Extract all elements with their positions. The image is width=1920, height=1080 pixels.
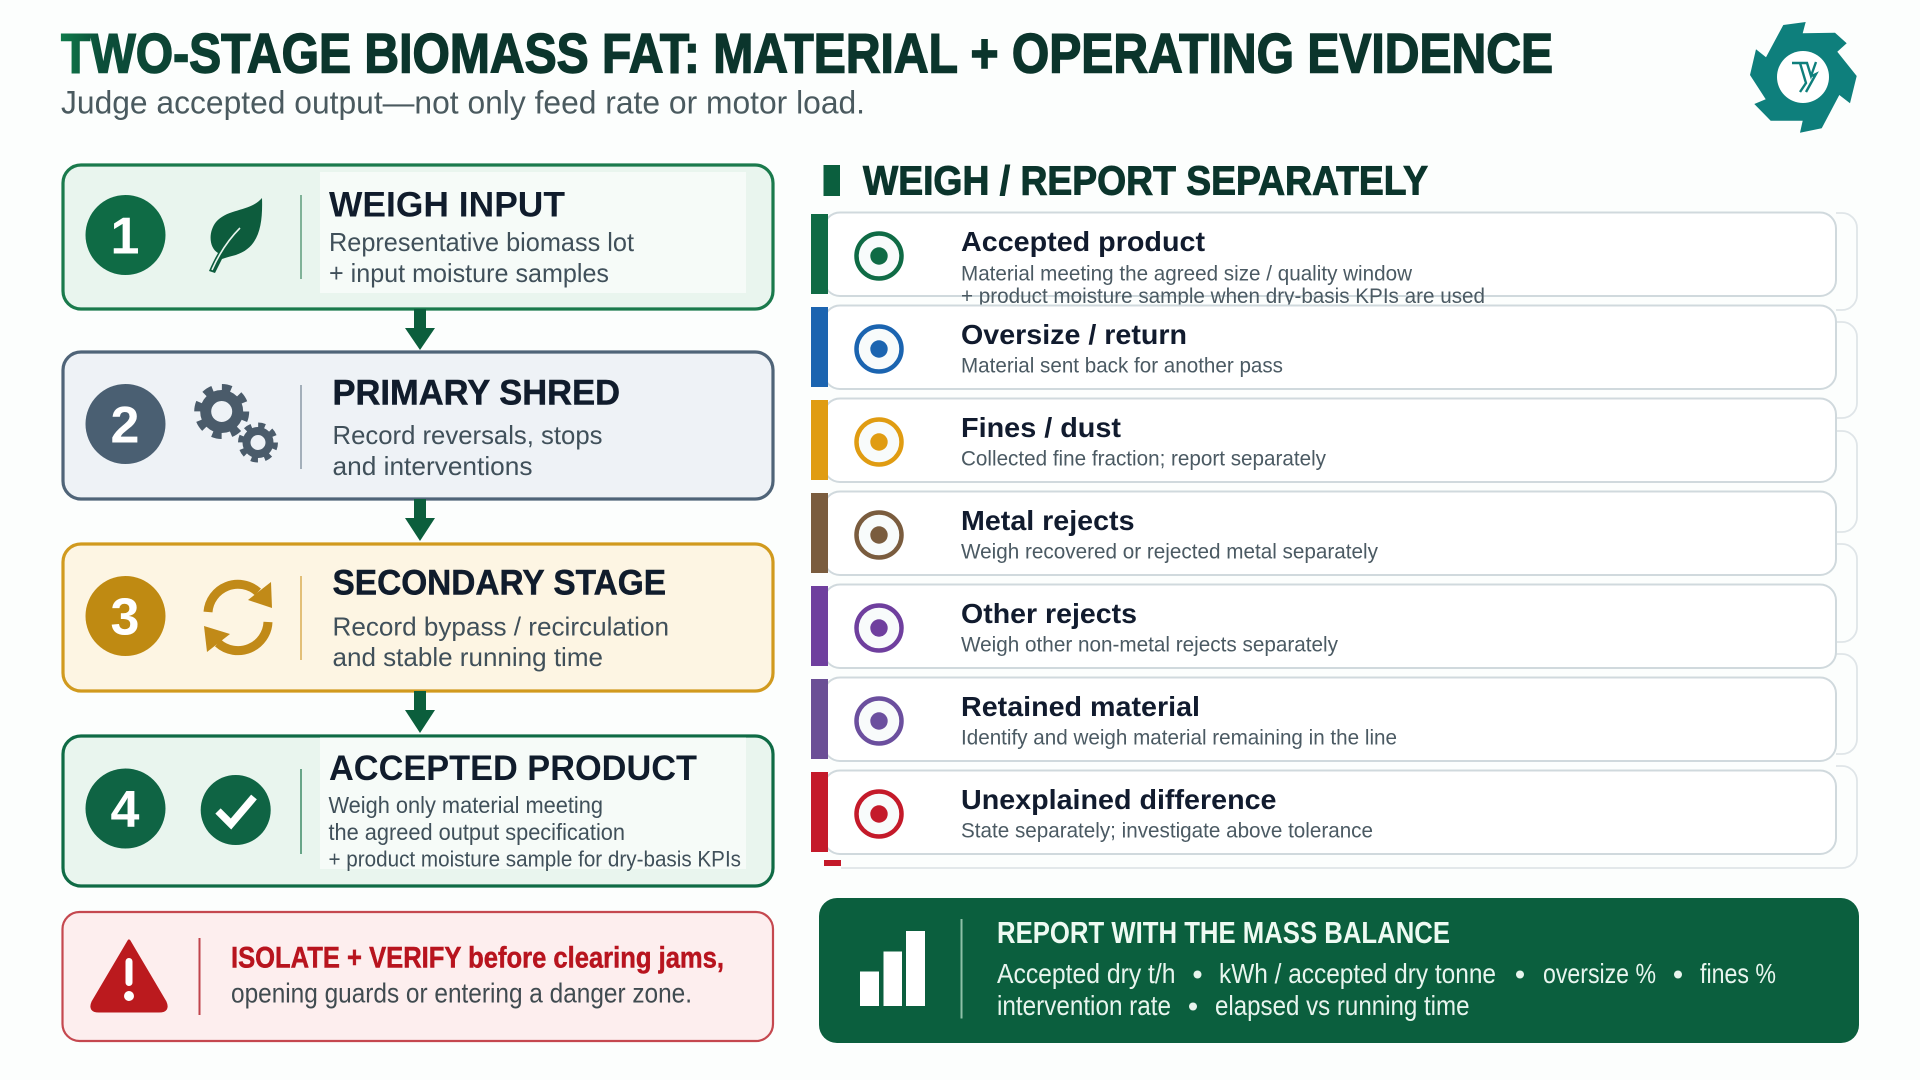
step description: + product moisture sample for dry-basis KPIs	[328, 846, 741, 872]
step heading: SECONDARY STAGE	[332, 564, 666, 602]
step description	[332, 420, 602, 481]
step number 4: 4	[111, 781, 140, 839]
step description: and interventions	[332, 451, 532, 481]
row description: Identify and weigh material remaining in the line	[961, 726, 1397, 750]
row title: Metal rejects	[961, 505, 1134, 536]
panel: step 1 weigh input	[63, 165, 773, 309]
step number 1	[86, 195, 166, 275]
row: retained material	[811, 678, 1836, 761]
row title: Oversize / return	[961, 319, 1187, 350]
step description	[329, 227, 635, 288]
row: fines	[811, 398, 1836, 482]
row: other rejects	[811, 584, 1836, 668]
step number 1: 1	[111, 208, 139, 266]
icon: target amber	[856, 420, 902, 464]
section heading: WEIGH / REPORT SEPARATELY	[863, 158, 1428, 204]
icon: bar chart	[860, 931, 925, 1006]
section marker	[824, 165, 840, 196]
row title: Other rejects	[961, 598, 1137, 629]
row title: Accepted product	[961, 226, 1205, 257]
panel: step 3 secondary stage	[63, 544, 773, 691]
KPI list: Accepted dry t/h	[997, 958, 1176, 989]
arrow: step 3 to 4	[405, 691, 435, 733]
icon: target violet	[856, 698, 902, 744]
row description	[961, 262, 1485, 308]
icon: check mark	[201, 775, 271, 845]
row description: Weigh other non-metal rejects separately	[961, 634, 1338, 656]
arrow: step 2 to 3	[405, 499, 435, 541]
KPI list: intervention rate	[997, 990, 1171, 1021]
step heading: ACCEPTED PRODUCT	[329, 749, 697, 788]
icon: target blue	[856, 326, 902, 372]
warning text	[231, 942, 724, 1008]
row: oversize	[811, 306, 1836, 389]
icon: leaf	[209, 198, 262, 273]
icon: target brown	[856, 512, 902, 558]
step number 2: 2	[111, 396, 139, 454]
logo: saw-tooth gear	[1750, 22, 1857, 133]
step description: Weigh only material meeting	[328, 792, 603, 818]
step description	[332, 612, 669, 672]
warning text: opening guards or entering a danger zone.	[231, 978, 692, 1008]
step number 4	[86, 768, 166, 848]
icon: target green	[856, 234, 902, 278]
panel: safety warning	[62, 912, 773, 1041]
back card outlines	[824, 213, 1857, 868]
KPI list	[997, 958, 1776, 1021]
step number 3: 3	[111, 588, 139, 646]
icon: recirculation arrows	[204, 582, 272, 652]
title: TWO-STAGE BIOMASS FAT: MATERIAL + OPERATING EVIDENCE	[61, 22, 1553, 84]
icon: target purple	[856, 606, 902, 650]
row title: Unexplained difference	[961, 784, 1276, 815]
icon: gears	[198, 388, 276, 460]
step number 2	[86, 384, 166, 464]
step description: and stable running time	[332, 642, 603, 672]
icon: warning triangle	[92, 941, 166, 1011]
KPI list: kWh / accepted dry tonne	[1219, 958, 1496, 989]
arrow: step 1 to 2	[405, 309, 435, 350]
row title: Retained material	[961, 691, 1200, 722]
row description: + product moisture sample when dry-basis KPIs are used	[961, 285, 1485, 308]
row: unexplained difference	[811, 770, 1836, 854]
step description: Record reversals, stops	[332, 420, 602, 450]
step heading: PRIMARY SHRED	[332, 374, 620, 412]
panel: step 2 primary shred	[63, 352, 773, 499]
step number 3	[86, 576, 166, 656]
step heading: WEIGH INPUT	[329, 186, 565, 224]
row description: Collected fine fraction; report separately	[961, 448, 1326, 470]
row: metal rejects	[811, 492, 1836, 575]
step description: the agreed output specification	[328, 819, 625, 845]
row description: State separately; investigate above tolerance	[961, 820, 1373, 842]
KPI list: elapsed vs running time	[1215, 990, 1470, 1021]
KPI list: fines %	[1700, 958, 1776, 989]
subtitle: Judge accepted output—not only feed rate or motor load.	[61, 84, 865, 120]
row title: Fines / dust	[961, 412, 1121, 443]
step description: Record bypass / recirculation	[332, 612, 669, 642]
step description: + input moisture samples	[329, 258, 609, 288]
report heading: REPORT WITH THE MASS BALANCE	[997, 915, 1450, 950]
row description: Material sent back for another pass	[961, 354, 1283, 378]
row: accepted product	[811, 212, 1836, 308]
step description: Representative biomass lot	[329, 227, 635, 257]
icon: target red	[856, 792, 902, 836]
row description: Material meeting the agreed size / quality window	[961, 262, 1413, 286]
panel: step 4 accepted product	[63, 736, 773, 886]
KPI list: oversize %	[1543, 958, 1656, 989]
row description: Weigh recovered or rejected metal separately	[961, 540, 1378, 564]
panel: report with the mass balance	[819, 898, 1859, 1043]
step description	[328, 792, 741, 872]
warning text: ISOLATE + VERIFY before clearing jams,	[231, 942, 724, 974]
